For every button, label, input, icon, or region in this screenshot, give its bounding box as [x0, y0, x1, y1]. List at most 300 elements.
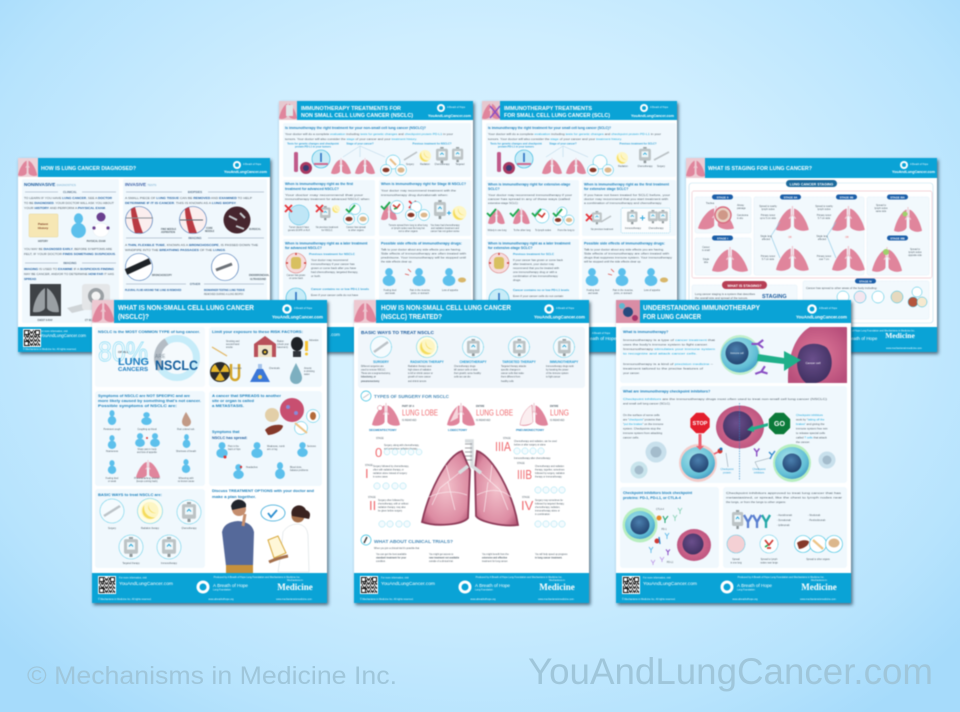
footer: Produced by A Breath of Hope Lung Foundation and Mechanisms in Medicine Inc.	[738, 576, 825, 579]
panel: extensive-stage: To lymph nodes	[535, 230, 552, 232]
panel: symptoms: Hoarseness	[106, 450, 119, 453]
panel: invasive tests: DETERMINE IF IT IS CANCER . THIS IS KNOWN AS A LUNG BIOPSY .	[125, 201, 237, 205]
panel: what is staging	[692, 281, 797, 323]
panel: stage IV: Cancer has spread to other areas of the body including:	[806, 286, 877, 290]
surgery type: pneumonectomy: PNEUMONECTOMY	[516, 428, 544, 432]
panel: stage IA: Cancer	[702, 246, 710, 249]
lung cancer staging frame	[689, 180, 933, 323]
panel: stage IIIA and IIIB: Spread to	[876, 204, 887, 207]
panel: extensive-stage: Widely in one lung	[488, 230, 507, 232]
panel: approved use: metastasized, or spread, like the chest to lymph nodes near	[726, 496, 842, 500]
panel: stage IIIA and IIIB: STAGE IIIB	[890, 236, 905, 240]
icon: patient history folder: Patient	[38, 222, 48, 226]
section: clinical trials: You might get access to	[429, 553, 454, 556]
panel: side effects SCLC: drugs that suppress immune system. Your immunotherapy	[584, 256, 673, 260]
panel: stage IIA and IIB: 5-7 cm wide	[818, 218, 831, 220]
surgery type: lobectomy: IS REMOVED	[476, 420, 491, 422]
T cell	[622, 508, 658, 542]
icons: tests, lungs, organs and prior treatment: Targeted	[456, 163, 465, 166]
panel: basic ways to treat: by boosting the power	[546, 368, 569, 372]
panel: 80 percent statistic: ARE	[155, 354, 166, 360]
surgery type: segmentectomy: PART OF A	[402, 405, 414, 408]
header: (NSCLC) TREATED?	[381, 314, 442, 321]
stage notes: STAGE	[365, 464, 373, 467]
card: how is lung cancer diagnosed	[18, 158, 270, 352]
icon: tumor growth circle	[489, 253, 509, 273]
surgery type: pneumonectomy: IS REMOVED	[550, 420, 565, 422]
panel: later treatment SCLC: one immunotherapy drug or with a	[513, 270, 557, 274]
panel: 80 percent statistic: CANCERS	[118, 367, 148, 373]
panel: right treatment for NSCLC: Stage of your cancer?	[346, 142, 374, 146]
header: YouAndLungCancer.com	[272, 314, 323, 320]
surgery type: pneumonectomy: ENTIRE	[550, 406, 559, 408]
checkpoint proteins	[714, 448, 775, 470]
panel: risk factors: Asbestos	[309, 339, 319, 342]
panel: first treatment: for NSCLC	[321, 229, 333, 232]
panel: stage 0: Trachea	[706, 202, 715, 205]
icons: where cancer spreads	[727, 535, 842, 553]
panel: what is immunotherapy: uses the body's immune system to fight cancer.	[623, 342, 708, 346]
panel: symptoms	[95, 391, 205, 486]
footer: For more information, visit	[119, 576, 147, 580]
panel: right treatment for SCLC	[486, 123, 676, 177]
panel: basic ways to treat: them different from	[501, 376, 520, 378]
panel: basic ways to treat: Chemotherapy drugs	[454, 365, 476, 368]
panel: invasive tests: ULTRASOUND	[250, 278, 266, 281]
panel: metastasis: NSCLC has spread:	[212, 436, 247, 440]
panel: approved use: - Ipilimumab	[777, 525, 790, 527]
panel: stage IV	[803, 278, 929, 319]
panel: invasive tests: BIOMARKER TESTING LUNG TISSUE	[204, 289, 245, 292]
panel: stage IIA and IIB: affected	[762, 238, 771, 241]
stage notes: followed by surgery, radiation	[535, 472, 565, 475]
watermark: website: YouAndLungCancer.com	[528, 651, 933, 692]
patient	[222, 500, 254, 573]
panel: first treatment	[283, 180, 375, 236]
panel: checkpoint inhibitors: brakes" and giving the	[796, 422, 825, 426]
T cell with checkpoint on	[679, 444, 717, 482]
icons: tests, lungs, organs and prior treatment: Chemotherapy	[434, 163, 450, 166]
panel: checkpoint inhibitors: immune system from attacking	[623, 431, 663, 435]
footer strip: A Breath of Hope	[592, 332, 611, 335]
section: clinical trials: You will help speed up progress	[535, 553, 568, 556]
panel: what is staging: STAGING	[762, 294, 787, 300]
panel: what is immunotherapy: to recognize and attack cancer cells.	[623, 352, 697, 356]
panel: stage 0: passage	[737, 208, 746, 210]
panel: symptoms: Possible symptoms of NSCLC are:	[98, 404, 177, 408]
footer	[18, 327, 270, 352]
panel: treatment options: Immunotherapy	[161, 562, 178, 565]
header: WHAT IS NON-SMALL CELL LUNG CANCER	[118, 305, 254, 312]
panel: 80 percent statistic: NSCLC	[155, 357, 198, 373]
panel: symptoms: Pneumonia/lung infection	[134, 477, 161, 480]
heading: types of surgery: TYPES OF SURGERY FOR NSCLC	[374, 394, 450, 399]
panel: basic ways to treat: to kill or shrink cancer or	[408, 372, 433, 375]
text: discuss treatment options: make a plan together.	[212, 495, 256, 499]
panel: later treatment: immunotherapy if your cancer has	[311, 262, 355, 266]
stage notes: radiation therapy; may also	[378, 506, 406, 509]
panel: approved use: the lungs, or from the lungs to other organs:	[726, 500, 786, 504]
icons: eligibility conditions	[285, 204, 368, 225]
icon: stop sign	[690, 412, 710, 434]
panel: invasive tests: ASPIRATION	[161, 231, 175, 234]
panel: side effects	[379, 239, 471, 323]
panel: extensive-stage: cancer has spread in any of these ways (called	[488, 197, 571, 201]
panel: later treatment: grown or come back after you have	[311, 266, 357, 270]
panel: symptoms: Wheezing with	[179, 477, 194, 480]
icon: go sign: GO	[774, 421, 785, 428]
panel: what is immunotherapy: Immunotherapy is a kind of precision medicine –	[623, 362, 713, 366]
chest x-ray	[30, 284, 61, 316]
footer strip: eath of Hope	[590, 336, 617, 341]
panel: what is staging: the overall size and spread of the tumors.	[695, 296, 748, 300]
panel: basic ways to treat: Different surgeries are	[361, 365, 384, 368]
illustration: central lungs	[422, 0, 518, 525]
header: YouAndLungCancer.com	[428, 114, 471, 118]
panel: side effects: Talk to your doctor about any side effects you are having.	[381, 248, 461, 252]
panel: basic ways to treat: high doses of radiation	[408, 368, 432, 372]
panel: metastasis: A cancer that SPREADS to another	[212, 394, 282, 398]
surgery type: lobectomy	[447, 403, 513, 432]
panel: invasive tests	[123, 179, 270, 323]
T cell attacking cancer cell	[720, 327, 847, 383]
panel: checkpoint types: CTLA-4	[656, 508, 665, 511]
panel: symptoms: more likely caused by something that's not cancer.	[98, 399, 201, 403]
footer: For more information, visit	[40, 330, 68, 333]
panel: invasive tests: CORE	[206, 228, 213, 230]
panel: checkpoint inhibitors: inhibitors	[754, 470, 765, 474]
icon: PD-L1	[489, 289, 509, 309]
panel: checkpoint inhibitors: called T cells that attack	[796, 436, 827, 440]
panel: stage IIA and IIB: Spread to nearby	[815, 205, 834, 208]
panel: later treatment SCLC: recommend that you be treated with	[513, 266, 560, 270]
panel: stage IIIA and IIIB	[867, 194, 929, 275]
stage notes: before or after surgery or alone	[514, 444, 546, 446]
panel: treatment options: BASIC WAYS to treat NSCLC are:	[98, 493, 162, 497]
panel: later treatment SCLC: If your cancer has grown or come back	[513, 258, 563, 262]
panel: approved use: - Nivolumab	[808, 515, 821, 517]
panel: stage IIA and IIB: Primary tumor	[817, 255, 831, 258]
text: discuss treatment options: Discuss TREATMENT OPTIONS with your doctor and	[212, 489, 315, 493]
panel: stage 0: Airway	[737, 204, 745, 207]
stage notes: chemotherapy, radiation,	[535, 506, 560, 509]
header	[686, 158, 937, 178]
panel: stage IA: is small	[702, 250, 710, 252]
footer: www.abreathofhope.org	[470, 598, 496, 601]
footer: Medicine	[885, 331, 915, 340]
footer: YouAndLungCancer.com	[643, 581, 697, 586]
panel: invasive tests: WINDPIPE INTO THE BREATHING PASSAGES OF THE LUNGS .	[125, 248, 226, 252]
panel: stage IA: STAGE I	[717, 236, 728, 240]
panel: treatment options	[95, 489, 205, 568]
panel: checkpoint inhibitors: On the surface of some cells	[623, 413, 660, 417]
panel: stage 0: STAGE 0	[717, 195, 729, 199]
surgery type: lobectomy: ENTIRE	[476, 406, 485, 408]
stage notes: radiation alone instead of surgery	[373, 472, 408, 475]
panel: stage IIA and IIB: OR	[845, 237, 849, 239]
panel: what is immunotherapy: Immunotherapy stimulates your immune system	[623, 347, 716, 351]
panel: approved use: Spread to lymph	[761, 558, 778, 561]
panel: right treatment for SCLC: Stage of your cancer?	[549, 142, 577, 146]
panel: side effects: and weak	[385, 293, 396, 295]
panel: first treatment SCLC: Immunotherapy	[625, 227, 642, 230]
panel: 80 percent statistic: NSCLC is the MOST COMMON TYPE of lung cancer.	[98, 330, 200, 334]
icon: patient history folder	[29, 214, 58, 237]
icon: patient history folder: History	[38, 226, 48, 230]
panel: side effects SCLC	[582, 239, 676, 323]
stage notes: Immunotherapy after chemotherapy	[514, 457, 551, 460]
panel: what is immunotherapy	[620, 327, 847, 383]
header: UNDERSTANDING IMMUNOTHERAPY	[643, 305, 760, 312]
icon: doctor	[92, 212, 110, 237]
footer: Medicine	[801, 582, 837, 592]
panel: later treatment: Cancer contains no or low PD-L1 levels	[311, 287, 369, 291]
panel: side effects SCLC: Possible side effects of immunotherapy drugs:	[584, 242, 665, 246]
T cell released	[773, 444, 811, 482]
footer: Produced by A Breath of Hope Lung Foundation and Mechanisms in Medicine Inc.	[476, 576, 563, 579]
lung cancer staging frame: LUNG CANCER STAGING	[790, 182, 834, 186]
panel: checkpoint inhibitors: cancer cells.	[623, 436, 639, 440]
panel: checkpoint inhibitors: protein	[723, 470, 732, 474]
panel: symptoms: Symptoms of NSCLC are NOT SPECIFIC and are	[98, 394, 190, 398]
panel: basic ways to treat	[358, 327, 585, 388]
panel: risk factors	[209, 327, 322, 387]
panel: symptoms: and loss of appetite	[137, 451, 158, 454]
header: A Breath of Hope	[819, 307, 838, 310]
panel: side effects SCLC: Feeling tired	[587, 289, 600, 292]
watermark: copyright: © Mechanisms in Medicine Inc.	[27, 662, 397, 690]
panel: stage III: and radiation treatment and	[431, 227, 460, 230]
CT scanner	[67, 284, 110, 313]
stage notes: be given before surgery	[378, 510, 403, 512]
heading: types of surgery	[361, 391, 450, 401]
panel: symptoms: no known cause	[178, 481, 195, 483]
panel: side effects SCLC: Pain in the muscles,	[613, 289, 634, 292]
panel: metastasis: Headaches	[246, 467, 258, 469]
icon: stop sign: STOP	[693, 421, 708, 427]
panel: first treatment SCLC: Chemotherapy	[648, 227, 664, 230]
panel: right treatment for NSCLC: Is immunotherapy the right treatment for your non-small cell lung cancer (NSCLC)?	[285, 126, 426, 130]
header	[279, 101, 473, 120]
panel: metastasis: arm or leg	[267, 448, 278, 451]
panel: stage IIA and IIB: affected	[818, 238, 827, 241]
header bar	[18, 158, 270, 177]
panel: extensive-stage: Your doctor may recommend immunotherapy if your	[488, 193, 572, 197]
panel: approved use: Checkpoint inhibitors approved to treat lung cancer that has	[726, 491, 842, 495]
icon: asbestos mask	[291, 337, 308, 357]
symptom blobs	[216, 442, 308, 479]
panel: noninvasive: TO BE DIAGNOSED . YOUR DOCTOR WILL ASK YOU ABOUT	[24, 201, 114, 205]
panel: what is immunotherapy: treatment tailored to the precise features of	[623, 366, 703, 370]
biopsy circles	[126, 206, 250, 234]
panel: checkpoint inhibitors: Checkpoint	[721, 467, 734, 471]
panel: metastasis: a METASTASIS.	[212, 404, 244, 408]
panel: checkpoint inhibitors: Checkpoint inhibitors	[796, 413, 823, 417]
panel: stage III: You have had chemotherapy	[430, 224, 460, 227]
panel: noninvasive: NONINVASIVE DIAGNOSTICS	[24, 182, 76, 187]
section: clinical trials: You can get the best available	[376, 553, 407, 556]
panel: checkpoint inhibitors: work by "taking off the	[796, 418, 825, 422]
section: clinical trials: treatment for lung cancer.	[482, 560, 508, 563]
section: clinical trials: extensive and effective	[482, 556, 508, 560]
card: what is staging	[686, 158, 937, 352]
panel: approved use: Spread to other organs	[806, 558, 831, 561]
footer: © Mechanisms in Medicine Inc. All rights reserved.	[98, 598, 152, 601]
panel: first treatment: Your doctor may recommend that your	[285, 193, 363, 197]
panel: checkpoint inhibitors: are "checkpoint" proteins that	[623, 418, 661, 422]
panel: basic ways to treat: of the immune system	[546, 372, 569, 375]
panel: later treatment: When is immunotherapy right as a later treatment	[285, 242, 368, 246]
panel: stage 0	[695, 194, 751, 233]
panel: what is staging: Lung cancer staging is a system that describes	[695, 292, 756, 296]
panel: stage III: immunotherapy drug durvalumab when:	[381, 193, 448, 197]
footer: © Mechanisms in Medicine Inc. All rights reserved.	[360, 598, 414, 601]
panel: metastasis: balance problems	[290, 469, 309, 472]
footer: Mechanisms in	[549, 579, 566, 582]
header: IMMUNOTHERAPY TREATMENTS FOR	[301, 106, 401, 112]
footer: © Mechanisms in Medicine Inc. All rights reserved.	[23, 348, 77, 351]
footer: Lung Foundation	[475, 588, 494, 592]
header: IMMUNOTHERAPY TREATMENTS	[504, 106, 592, 112]
panel: side effects SCLC: Side effects of immunotherapy are often treated with	[584, 252, 669, 256]
panel: approved use: - Atezolizumab	[777, 514, 793, 517]
panel: first treatment: to other organs	[348, 229, 365, 232]
icon: PD-L1	[286, 288, 306, 308]
panel: treatment options: Radiation therapy	[141, 527, 160, 530]
panel: later treatment: for advanced NSCLC?	[285, 246, 322, 250]
section: clinical trials: new treatment not available	[429, 556, 460, 560]
panel: checkpoint inhibitors: and small cell lung cancer (SCLC).	[623, 402, 671, 406]
panel: basic ways to treat: These are a segmentectomy,	[361, 372, 391, 375]
icon: IV bag with antibodies	[732, 510, 770, 529]
panel: what is staging: WHAT IS STAGING?	[727, 284, 762, 288]
icon: patient	[71, 213, 86, 238]
footer: Produced by A Breath of Hope Lung Foundation and Mechanisms in Medicine Inc.	[214, 576, 301, 579]
stage notes: in some cases	[373, 476, 389, 478]
panel: basic ways to treat: cells too can die	[454, 376, 471, 378]
panel: noninvasive: PHYSICAL EXAM	[87, 240, 106, 243]
panel: symptoms: Sharp pain in body	[137, 448, 157, 451]
footer: Lung Foundation	[737, 588, 756, 592]
header: (NSCLC)?	[118, 314, 149, 321]
T cell attacking cancer cell: Immune cell	[730, 352, 744, 355]
panel: noninvasive: CLINICAL	[63, 190, 77, 194]
footer: www.abreathofhope.org	[208, 598, 234, 601]
panel: basic ways to treat: healthy cells	[501, 380, 514, 383]
panel: side effects: the side effects clear up.	[381, 260, 412, 264]
footer: Medicine	[539, 582, 575, 592]
panel: checkpoint types: PD-L1	[667, 562, 674, 564]
card: understanding immunotherapy	[616, 300, 851, 603]
panel: 80 percent statistic: LUNG	[118, 357, 149, 368]
panel: later treatment: or come back	[289, 277, 304, 280]
stage notes: followed by targeted therapy,	[535, 502, 565, 506]
panel: later treatment SCLC: Even if your cancer cells do not contain	[513, 294, 564, 298]
panel: stage III: or lymph nodes near the lung but	[391, 227, 425, 230]
panel: first treatment SCLC: doctor may recommend that you start treatment with	[584, 197, 668, 201]
header: YouAndLungCancer.com	[796, 314, 847, 320]
treatment circles	[100, 498, 201, 559]
panel: side effects SCLC: will be stopped until the side effects clear up.	[584, 260, 642, 264]
panel: noninvasive: YOU MAY BE DIAGNOSED EARLY , BEFORE SYMPTOMS ARE	[24, 247, 112, 251]
surgery type: lobectomy: LUNG LOBE	[476, 408, 513, 418]
panel: first treatment: Cancer has spread	[346, 226, 366, 229]
footer: YouAndLungCancer.com	[119, 581, 173, 586]
panel: stage IIA and IIB: Primary tumor	[817, 214, 831, 217]
stage notes: 0	[375, 445, 382, 460]
stage notes: Surgery may sometimes be	[535, 499, 564, 502]
header: A Breath of Hope	[556, 307, 575, 310]
panel: stage IIA and IIB: over 7 cm	[819, 258, 829, 261]
panel: stage 0: Carcinoma	[737, 214, 749, 217]
panel: stage IIA and IIB: Primary tumor	[761, 255, 775, 258]
panel: basic ways to treat: lobectomy, or	[361, 376, 376, 378]
panel: later treatment: Even if your cancer cells do not have	[311, 293, 359, 297]
panel: symptoms: or weak	[108, 480, 117, 483]
panel: checkpoint inhibitors: immune system free rein	[796, 426, 828, 430]
panel: stage IIA and IIB: lymph nodes	[761, 209, 775, 211]
panel: checkpoint inhibitors: system. Checkpoints stop the	[623, 426, 661, 430]
panel: metastasis: site or organ is called	[212, 399, 255, 403]
stage notes: STAGE	[503, 437, 511, 440]
panel: stage IIIA and IIIB: Spread to	[910, 248, 921, 251]
panel: stage III: Tumors spread from lung to other lung	[389, 224, 428, 227]
panel: basic ways to treat: SURGERY	[373, 360, 390, 364]
panel: checkpoint types: Checkpoint inhibitors block checkpoint	[623, 491, 693, 495]
card: immunotherapy treatments for NSCLC	[279, 101, 473, 352]
panel: noninvasive: SPREAD.	[24, 277, 37, 281]
panel: symptoms: Coughing up blood	[137, 429, 157, 431]
footer	[616, 573, 851, 603]
panel: treatment options: Targeted therapy	[122, 562, 140, 565]
panel: right treatment for NSCLC: protein PD-L1 in your tumors	[295, 144, 331, 148]
header	[354, 300, 589, 323]
panel: right treatment for NSCLC: Tests for genetic changes and checkpoint	[287, 142, 339, 146]
header: A Breath of Hope	[294, 307, 313, 310]
panel: approved use: - Durvalumab	[777, 519, 792, 522]
panel: extensive-stage	[486, 180, 579, 236]
panel: stage IIIA and IIIB: STAGE IIIA	[890, 195, 905, 199]
panel: metastasis: Seizures	[307, 445, 317, 448]
panel: invasive tests: ENDOBRONCHIAL	[249, 274, 270, 277]
panel: extensive-stage: From the lung to	[558, 229, 575, 232]
panel: approved use: Spread	[732, 558, 740, 561]
section: clinical trials: outside of a clinical trial.	[429, 560, 454, 563]
header: NON SMALL CELL LUNG CANCER (NSCLC)	[301, 113, 413, 119]
panel: later treatment SCLC	[486, 239, 579, 323]
panel: right treatment for SCLC: protein PD-L1 in your tumors	[498, 144, 534, 148]
80% figure: 80%	[98, 336, 148, 367]
treatment icons	[370, 336, 574, 358]
panel: invasive tests: A THIN, FLEXIBLE TUBE , KNOWN AS A BRONCHOSCOPE , IS PASSED DOWN THE	[125, 243, 258, 247]
footer: www.mechanismsinmedicine.com	[538, 598, 574, 601]
panel: checkpoint inhibitors: the cancer.	[796, 440, 810, 444]
panel: first treatment: No previous treatment	[316, 226, 339, 229]
panel: extensive-stage: SCLC?	[488, 187, 500, 191]
panel: later treatment SCLC: When is immunotherapy right as a later treatment	[488, 242, 571, 246]
panel: stage IIA and IIB: STAGE IIB	[840, 195, 853, 199]
panel: 80 percent statistic: OF ALL	[118, 350, 129, 354]
panel: symptoms: Rust colored sub.	[177, 428, 195, 431]
panel: approved use: - Pembrolizumab	[808, 519, 826, 522]
header: A Breath of Hope	[650, 106, 669, 109]
panel: later treatment SCLC: drugs.	[513, 278, 521, 282]
panel: later treatment: Your doctor may recommend	[311, 258, 348, 262]
stage notes: Surgery, along with chemotherapy,	[384, 444, 420, 447]
panel: basic ways to treat: BASIC WAYS TO TREAT NSCLC	[361, 330, 435, 335]
organ illustrations	[265, 398, 320, 435]
panel: first treatment SCLC: When is immunotherapy right as the first treatment	[584, 182, 670, 186]
